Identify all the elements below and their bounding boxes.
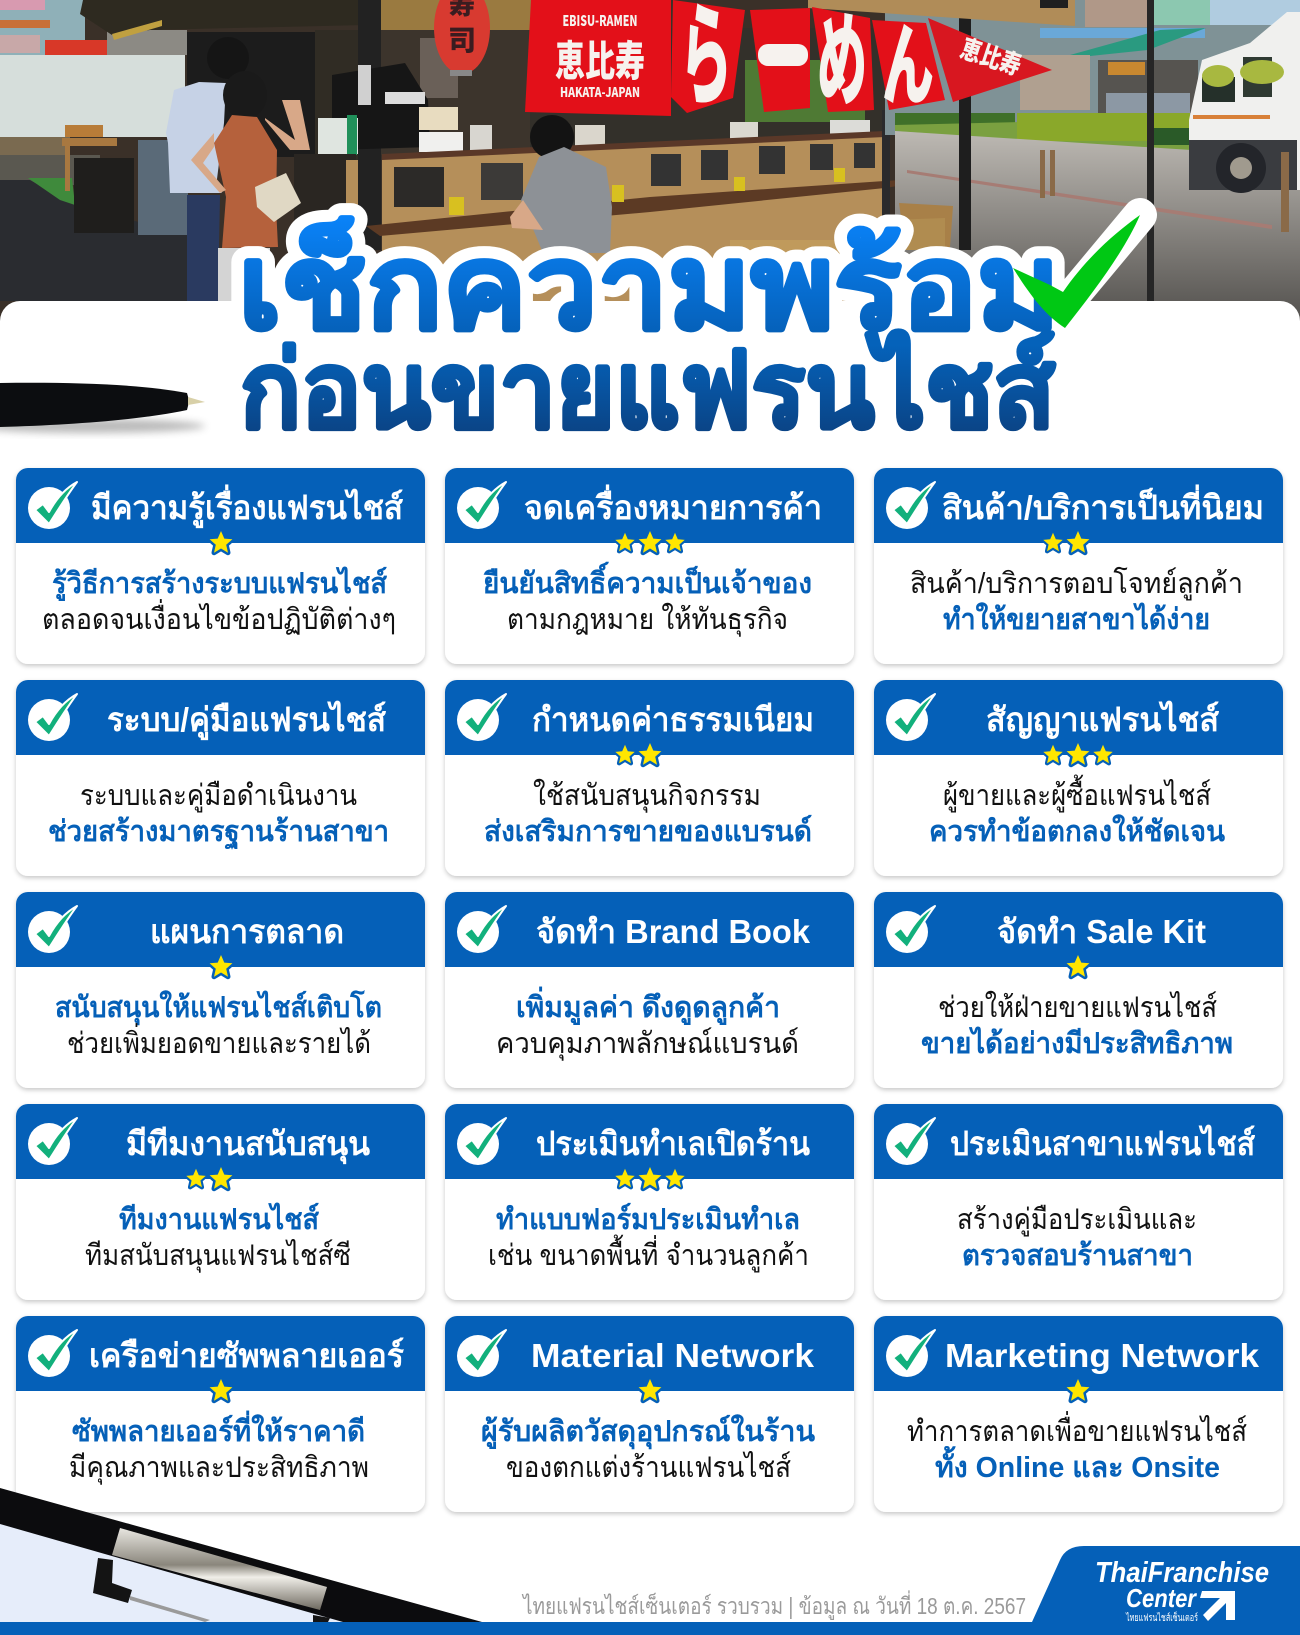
panel: supplier network bbox=[16, 1316, 425, 1512]
panel: sale kit: จัดทำ Sale Kit bbox=[997, 913, 1206, 950]
panel: location assessment: ประเมินทำเลเปิดร้าน bbox=[536, 1125, 810, 1162]
panel: popular product: สินค้า/บริการเป็นที่นิยม bbox=[942, 484, 1264, 526]
roof bbox=[80, 0, 365, 35]
panel: material network: ของตกแต่งร้านแฟรนไชส์ bbox=[506, 1450, 791, 1484]
panel: brand book: ควบคุมภาพลักษณ์แบรนด์ bbox=[496, 1027, 799, 1061]
panel: marketing plan: สนับสนุนให้แฟรนไชส์เติบโต bbox=[55, 989, 382, 1025]
photo: ramen stall street scene: 恵比寿 bbox=[956, 29, 1027, 83]
panel: system and manual: ระบบ/คู่มือแฟรนไชส์ bbox=[107, 700, 387, 741]
photo: ramen stall street scene: 司 bbox=[448, 19, 476, 59]
noren roof bbox=[808, 0, 1075, 26]
source note: ไทยแฟรนไชส์เซ็นเตอร์ รวบรวม | ข้อมูล ณ วันที่ 18 ต.ค. 2567 bbox=[521, 1590, 1026, 1620]
panel: trademark: ยืนยันสิทธิ์ความเป็นเจ้าของ bbox=[483, 561, 812, 600]
lantern bbox=[434, 0, 490, 74]
logo: ThaiFranchise Center: ThaiFranchise bbox=[1095, 1557, 1269, 1589]
panel: branch assessment: สร้างคู่มือประเมินและ bbox=[957, 1204, 1197, 1237]
panel: popular product: ทำให้ขยายสาขาได้ง่าย bbox=[943, 602, 1210, 636]
panel: knowledge: ตลอดจนเงื่อนไขข้อปฏิบัติต่างๆ bbox=[42, 599, 396, 636]
photo: ramen stall street scene: HAKATA-JAPAN bbox=[560, 82, 640, 101]
counter wood bbox=[382, 134, 885, 301]
logo: ThaiFranchise Center bbox=[1032, 1546, 1300, 1624]
panel: sale kit: ช่วยให้ฝ่ายขายแฟรนไชส์ bbox=[938, 990, 1217, 1024]
panel: popular product: สินค้า/บริการตอบโจทย์ลูกค้า bbox=[910, 566, 1243, 601]
logo: ThaiFranchise Center: Center bbox=[1126, 1583, 1198, 1613]
panel: location assessment: ทำแบบฟอร์มประเมินทำเล bbox=[496, 1202, 800, 1236]
panel: trademark: ตามกฎหมาย ให้ทันธุรกิจ bbox=[507, 602, 788, 637]
panel: popular product bbox=[874, 468, 1283, 664]
panel: location assessment: เช่น ขนาดพื้นที่ จำนวนลูกค้า bbox=[488, 1234, 809, 1273]
poles bbox=[959, 0, 971, 250]
panel: branch assessment: ประเมินสาขาแฟรนไชส์ bbox=[950, 1124, 1256, 1162]
photo: ramen stall street scene bbox=[0, 0, 1300, 330]
footer bar bbox=[0, 1622, 1300, 1635]
panel: material network bbox=[445, 1316, 854, 1512]
panel: marketing plan: แผนการตลาด bbox=[150, 913, 344, 950]
photo: ramen stall street scene: 恵比寿 bbox=[555, 28, 645, 89]
panel: system and manual: ช่วยสร้างมาตรฐานร้านสาขา bbox=[48, 816, 389, 850]
panel: brand book: เพิ่มมูลค่า ดึงดูดลูกค้า bbox=[516, 986, 780, 1025]
title bbox=[238, 215, 1140, 450]
panel: location assessment bbox=[445, 1104, 854, 1300]
title line 1 halo: เช็กความพร้อม bbox=[238, 216, 1060, 354]
panel: marketing network: ทำการตลาดเพื่อขายแฟรนไชส์ bbox=[907, 1411, 1247, 1448]
icon: clipboard bbox=[0, 1488, 482, 1622]
panel: brand book bbox=[445, 892, 854, 1088]
panel: contract: สัญญาแฟรนไชส์ bbox=[986, 700, 1220, 739]
left background bbox=[0, 0, 85, 55]
panel: marketing plan: ช่วยเพิ่มยอดขายและรายได้ bbox=[67, 1023, 371, 1060]
banner lettering: EBISU-RAMEN bbox=[562, 10, 638, 31]
panel: marketing plan bbox=[16, 892, 425, 1088]
panel: material network: ผู้รับผลิตวัสดุอุปกรณ์ในร้าน bbox=[481, 1414, 815, 1449]
panel: knowledge: มีความรู้เรื่องแฟรนไชส์ bbox=[91, 484, 404, 529]
interior bbox=[381, 0, 531, 30]
panel: support team: ทีมงานแฟรนไชส์ bbox=[119, 1202, 319, 1236]
panel: branch assessment bbox=[874, 1104, 1283, 1300]
panel: fees bbox=[445, 680, 854, 876]
title line 1: เช็กความพร้อม bbox=[238, 216, 1060, 354]
panel: contract: ผู้ขายและผู้ซื้อแฟรนไชส์ bbox=[943, 774, 1211, 813]
panel: sale kit bbox=[874, 892, 1283, 1088]
panel: supplier network: เครือข่ายซัพพลายเออร์ bbox=[89, 1337, 404, 1374]
panel: fees: ส่งเสริมการขายของแบรนด์ bbox=[484, 814, 812, 848]
panel: contract bbox=[874, 680, 1283, 876]
panel: supplier network: ซัพพลายเออร์ที่ให้ราคาดี bbox=[72, 1410, 365, 1448]
panel: supplier network: มีคุณภาพและประสิทธิภาพ bbox=[69, 1452, 369, 1485]
panel: sale kit: ขายได้อย่างมีประสิทธิภาพ bbox=[921, 1026, 1233, 1060]
panel: system and manual bbox=[16, 680, 425, 876]
icon: big green check bbox=[1013, 215, 1140, 328]
red noren banners bbox=[525, 0, 671, 116]
panel: marketing network: ทั้ง Online และ Onsite bbox=[935, 1445, 1220, 1484]
truck bbox=[1189, 12, 1300, 190]
logo: ThaiFranchise Center: ไทยแฟรนไชส์เซ็นเตอร์ bbox=[1125, 1610, 1198, 1624]
panel: contract: ควรทำข้อตกลงให้ชัดเจน bbox=[929, 814, 1225, 848]
panel: marketing network: Marketing Network bbox=[945, 1337, 1260, 1374]
stools bbox=[899, 203, 953, 247]
panel: support team bbox=[16, 1104, 425, 1300]
panel: trademark bbox=[445, 468, 854, 664]
icon: pen bbox=[0, 383, 205, 433]
panel: support team: ทีมสนับสนุนแฟรนไชส์ซี bbox=[85, 1238, 351, 1273]
panel: material network: Material Network bbox=[531, 1337, 815, 1374]
people bbox=[207, 37, 249, 79]
right street scene bbox=[885, 0, 1300, 135]
panel: fees: กำหนดค่าธรรมเนียม bbox=[532, 701, 814, 738]
panel: branch assessment: ตรวจสอบร้านสาขา bbox=[962, 1240, 1193, 1272]
title line 2: ก่อนขายแฟรนไชส์ bbox=[240, 330, 1055, 450]
panel: knowledge bbox=[16, 468, 425, 664]
panel: trademark: จดเครื่องหมายการค้า bbox=[524, 484, 822, 526]
panel: knowledge: รู้วิธีการสร้างระบบแฟรนไชส์ bbox=[52, 566, 387, 601]
panel: system and manual: ระบบและคู่มือดำเนินงาน bbox=[80, 780, 357, 813]
panel: marketing network bbox=[874, 1316, 1283, 1512]
panel: brand book: จัดทำ Brand Book bbox=[536, 913, 811, 950]
panel: support team: มีทีมงานสนับสนุน bbox=[126, 1125, 370, 1165]
panel: fees: ใช้สนับสนุนกิจกรรม bbox=[533, 778, 761, 813]
